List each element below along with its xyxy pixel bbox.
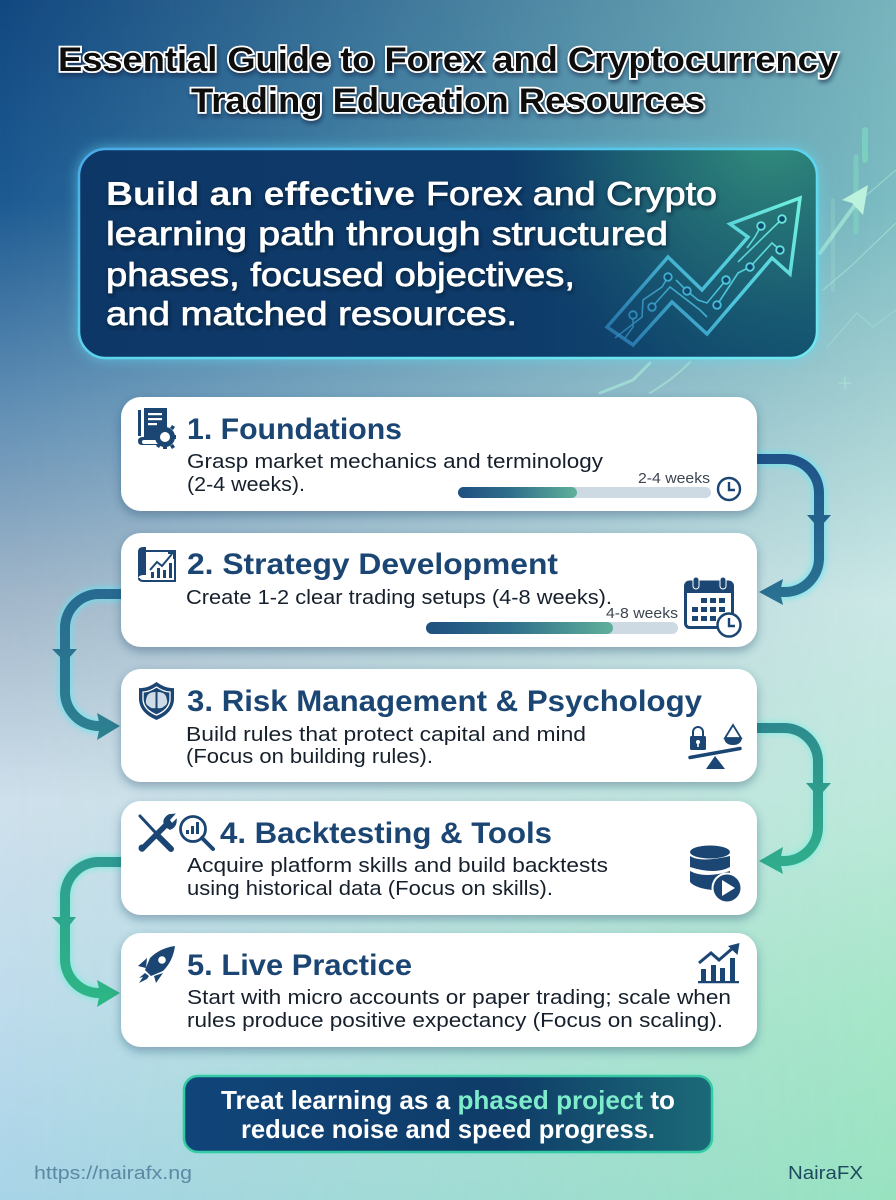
duration bar: 4-8 weeks <box>606 606 678 622</box>
hero text <box>106 175 717 332</box>
callout: takeaway: reduce noise and speed progress. <box>241 1114 655 1144</box>
arrow: phase 3 to 4 <box>757 728 831 874</box>
icon: calendar with clock <box>685 577 740 636</box>
duration bar <box>426 606 678 634</box>
icon: shield with brain <box>139 682 174 720</box>
footer brand: NairaFX <box>788 1163 863 1183</box>
panel: phase 3 risk management <box>121 669 757 782</box>
heading: 3. Risk Management & Psychology <box>187 685 702 718</box>
description <box>187 986 731 1032</box>
heading: 2. Strategy Development <box>187 548 558 581</box>
title: Essential Guide to Forex and Cryptocurrency <box>58 41 838 79</box>
panel: phase 5 live practice <box>121 933 757 1047</box>
hero text: and matched resources. <box>106 295 517 332</box>
callout: takeaway <box>184 1076 712 1152</box>
description: using historical data (Focus on skills). <box>187 877 553 900</box>
icon: growth chart <box>698 943 740 983</box>
icon: circuit growth arrow <box>607 198 800 345</box>
icon: chart scroll <box>138 547 175 581</box>
description <box>187 854 608 900</box>
hero text: Forex and Crypto <box>426 175 717 212</box>
heading: 4. Backtesting & Tools <box>220 817 552 850</box>
title <box>58 41 838 120</box>
hero text: phases, focused objectives, <box>106 256 575 293</box>
heading: 5. Live Practice <box>187 949 412 982</box>
arrow: phase 2 to 3 <box>52 594 121 740</box>
hero text: learning path through structured <box>106 215 668 252</box>
icon: database with play button <box>690 846 742 904</box>
panel: phase 4 backtesting <box>121 801 757 915</box>
description <box>186 723 586 768</box>
heading: 1. Foundations <box>187 413 402 446</box>
callout: takeaway: Treat learning as a phased project to <box>221 1085 675 1115</box>
icon: wrench and screwdriver <box>138 814 176 852</box>
icon: book and gear <box>138 408 176 449</box>
description: rules produce positive expectancy (Focus on scaling). <box>187 1009 723 1032</box>
footer url: https://nairafx.ng <box>34 1163 192 1183</box>
arrow: phase 4 to 5 <box>52 862 121 1007</box>
panel: phase 2 strategy development <box>121 533 757 647</box>
background chart lines <box>600 130 896 393</box>
icon: magnifier with bars <box>180 816 213 849</box>
icon: lock and balance scale <box>690 725 742 769</box>
icon: rocket <box>138 946 175 983</box>
panel: phase 1 foundations <box>121 397 757 511</box>
description: Acquire platform skills and build backtests <box>187 854 608 877</box>
description: Build rules that protect capital and mind <box>186 723 586 746</box>
description: (2-4 weeks). <box>187 473 305 496</box>
hero text: Build an effective <box>106 175 415 212</box>
description: Start with micro accounts or paper trading; scale when <box>187 986 731 1009</box>
panel: hero summary <box>79 149 817 358</box>
duration bar <box>458 471 711 498</box>
description: (Focus on building rules). <box>186 745 433 768</box>
description <box>187 450 604 496</box>
title: Trading Education Resources <box>191 82 705 120</box>
duration bar: 2-4 weeks <box>638 471 710 487</box>
description: Grasp market mechanics and terminology <box>187 450 604 473</box>
arrow: phase 1 to 2 <box>757 459 831 605</box>
description: Create 1-2 clear trading setups (4-8 weeks). <box>186 586 612 609</box>
icon: clock <box>718 478 740 500</box>
